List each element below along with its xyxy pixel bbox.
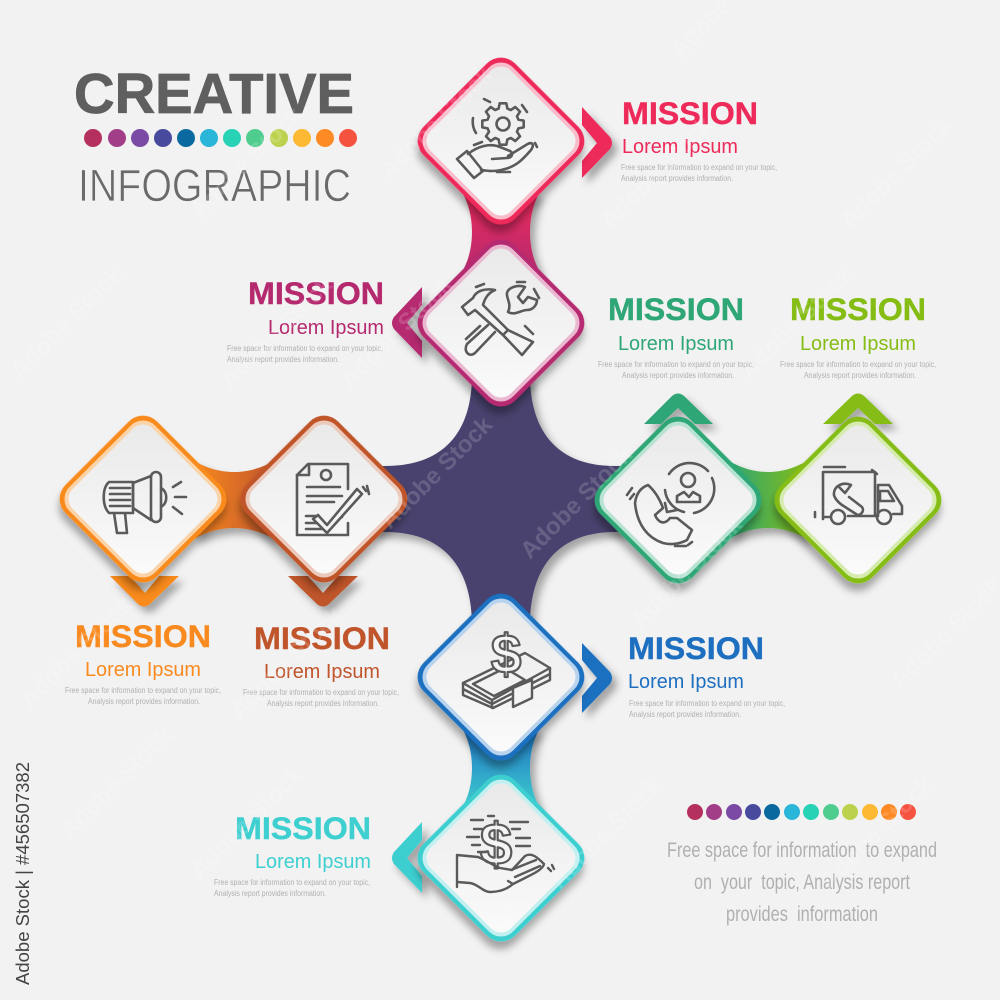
text block: mission teal: Free space for information to expand on your topic, (214, 878, 370, 887)
text block: mission magenta: Lorem Ipsum (268, 317, 384, 339)
chevron: down brown (288, 576, 358, 606)
colour dots row (84, 129, 357, 147)
connector: bottom arm (462, 728, 540, 808)
chevron: up lime (823, 394, 893, 424)
text block: mission green: MISSION (608, 291, 744, 327)
icon: hammer and wrench (462, 282, 539, 355)
icon: megaphone (104, 472, 186, 533)
watermark: Adobe Stock (15, 591, 138, 714)
watermark: Adobe Stock (185, 761, 308, 884)
text block: mission blue: Free space for information to expand on your topic, (629, 699, 785, 708)
watermark: Adobe Stock (815, 771, 938, 894)
chevron: up green (644, 394, 713, 424)
text block: mission magenta (227, 275, 384, 364)
text block: mission crimson: MISSION (622, 95, 758, 131)
text block: mission brown: Lorem Ipsum (264, 661, 380, 683)
watermark: Adobe Stock (375, 61, 498, 184)
text block: mission crimson: Lorem Ipsum (622, 136, 738, 158)
text block: mission crimson: Free space for information to expand on your topic, (621, 163, 777, 172)
text block: mission teal: Analysis report provides information. (214, 889, 326, 898)
text block: mission blue (628, 630, 785, 719)
title: CREATIVE: CREATIVE (74, 62, 354, 126)
diamond: crimson (409, 49, 593, 233)
stock id label: Adobe Stock | #456507382 (13, 762, 33, 985)
text block: mission teal (214, 810, 371, 898)
paragraph: free space text (667, 839, 937, 926)
watermark: Adobe Stock (515, 441, 638, 564)
text block: mission green: Lorem Ipsum (618, 333, 734, 355)
text block: mission orange: Free space for information to expand on your topic, (65, 686, 221, 695)
diamond: magenta (409, 231, 593, 415)
watermark: Adobe Stock (185, 101, 308, 224)
watermark: Adobe Stock (225, 601, 348, 724)
chevron: left teal (392, 822, 422, 893)
watermark: Adobe Stock (735, 261, 858, 384)
connector: right arm (729, 461, 807, 539)
text block: mission green: Analysis report provides information. (622, 371, 734, 380)
text block: mission green: Free space for information to expand on your topic, (598, 360, 754, 369)
paragraph: free space text: provides information (726, 903, 878, 926)
icon: hand receiving dollar (457, 812, 554, 892)
connector: left arm (194, 461, 274, 539)
icon: hand holding gear (457, 99, 537, 178)
diamond: lime (766, 408, 950, 592)
watermark: Adobe Stock (375, 411, 498, 534)
icon: document with checkmark (297, 464, 369, 535)
text block: mission lime: Analysis report provides information. (804, 371, 916, 380)
text block: mission orange: Lorem Ipsum (85, 659, 201, 681)
watermark: Adobe Stock (215, 271, 338, 394)
chevron: left magenta (392, 287, 422, 358)
text block: mission orange: MISSION (75, 618, 211, 654)
watermark: Adobe Stock (625, 511, 748, 634)
text block: mission teal: Lorem Ipsum (255, 851, 371, 873)
watermark: Adobe Stock (5, 261, 128, 384)
text block: mission magenta: Analysis report provides information. (227, 355, 339, 364)
text block: mission magenta: Free space for information to expand on your topic, (227, 344, 383, 353)
icon: repair truck (815, 467, 902, 524)
text block: mission brown: Free space for information to expand on your topic, (243, 688, 399, 697)
text block: mission brown: MISSION (254, 620, 390, 656)
text block: mission lime: Lorem Ipsum (800, 333, 916, 355)
paragraph: free space text: on your topic, Analysis report (694, 871, 910, 894)
diamond: orange (51, 407, 235, 591)
text block: mission brown (243, 620, 399, 708)
text block: mission blue: MISSION (628, 630, 764, 666)
watermark: Adobe Stock (545, 771, 668, 894)
text block: mission orange: Analysis report provides information. (88, 697, 200, 706)
watermark: Adobe Stock (55, 721, 178, 844)
chevron: right crimson (582, 107, 612, 178)
diamond: blue (409, 585, 593, 769)
text block: mission magenta: MISSION (248, 275, 384, 311)
text block: mission lime: MISSION (790, 291, 926, 327)
text block: mission blue: Analysis report provides information. (629, 710, 741, 719)
watermark: Adobe Stock (335, 271, 458, 394)
text block: mission crimson: Analysis report provides information. (621, 174, 733, 183)
watermark: Adobe Stock (595, 111, 718, 234)
text block: mission teal: MISSION (235, 810, 371, 846)
watermark: Adobe Stock (835, 111, 958, 234)
subtitle: INFOGRAPHIC: INFOGRAPHIC (78, 160, 351, 211)
text block: mission brown: Analysis report provides information. (267, 699, 379, 708)
text block: mission green (598, 291, 754, 380)
text block: mission lime: Free space for information to expand on your topic, (780, 360, 936, 369)
colour dots row small (687, 804, 916, 820)
chevron: right blue (582, 643, 612, 713)
text block: mission orange (65, 618, 221, 706)
connector: top arm (462, 192, 540, 272)
text block: mission lime (780, 291, 936, 380)
icon: phone and contact person (627, 463, 714, 546)
icon: dollar and banknote stack: $ (491, 623, 521, 685)
chevron: down orange (110, 576, 179, 606)
diamond: teal (409, 766, 593, 950)
diamond: brown (232, 407, 416, 591)
text block: mission crimson (621, 95, 777, 183)
diamond: green (586, 408, 770, 592)
icon: hand receiving dollar: $ (480, 812, 512, 877)
icon: dollar and banknote stack (463, 623, 550, 708)
text block: mission blue: Lorem Ipsum (628, 671, 744, 693)
central dark cross (370, 375, 630, 625)
